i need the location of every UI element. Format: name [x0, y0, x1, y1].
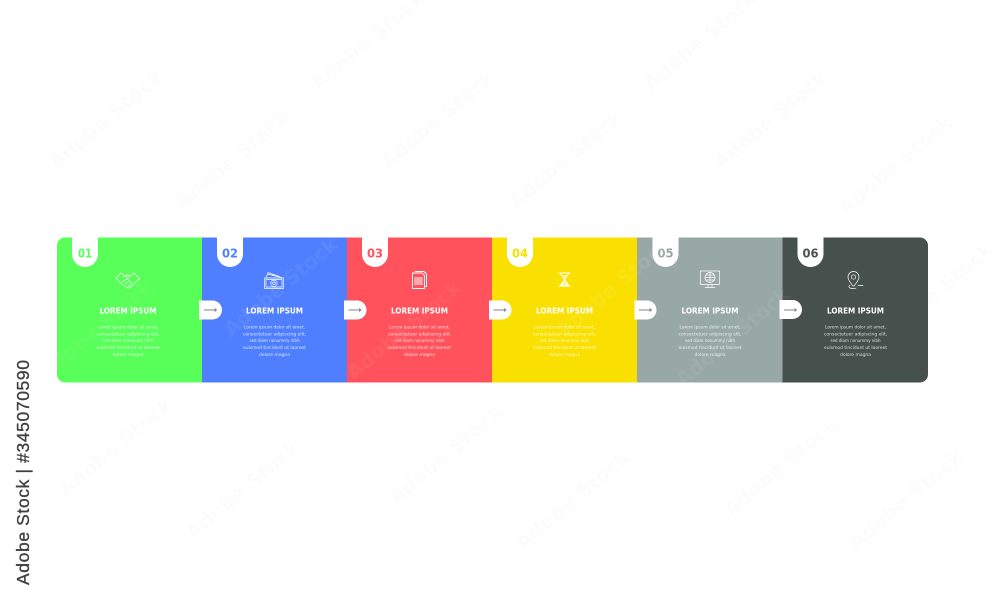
watermarks over panels	[34, 232, 795, 391]
panel background red	[347, 238, 492, 382]
number tab 05: 05	[658, 246, 674, 260]
body text: Lorem ipsum dolor sit amet,	[389, 324, 450, 330]
number tab 04	[507, 237, 533, 267]
body text: sed diam nonummy nibh	[540, 338, 590, 344]
number tab 02	[217, 237, 243, 267]
watermarks over panels: Adobe Stock	[219, 232, 343, 341]
body text: Lorem ipsum dolor sit amet,	[98, 324, 159, 330]
body text: sed diam nonummy nibh	[685, 338, 735, 344]
panel: step 01	[57, 237, 202, 382]
body text: dolore magna	[112, 352, 144, 358]
heading: LOREM IPSUM	[682, 306, 738, 316]
body text: sed diam nonummy nibh	[103, 338, 153, 344]
panel: step 06	[782, 237, 928, 382]
panel background dark	[782, 238, 928, 382]
watermarks over panels: Adobe Stock	[34, 275, 158, 384]
arrow tab 4	[634, 300, 656, 320]
heading: LOREM IPSUM	[100, 306, 156, 316]
panel: step 05	[637, 237, 782, 382]
number tab 03	[362, 237, 388, 267]
body text: euismod tincidunt ut laoreet	[678, 345, 742, 351]
body text: euismod tincidunt ut laoreet	[96, 345, 160, 351]
icon: banknotes	[264, 272, 284, 288]
number tab 01: 01	[78, 246, 92, 260]
panel background yellow	[492, 238, 638, 382]
heading: LOREM IPSUM	[536, 306, 593, 316]
body text	[388, 324, 452, 358]
body text: Lorem ipsum dolor sit amet,	[244, 324, 305, 330]
body text: euismod tincidunt ut laoreet	[824, 345, 887, 351]
body text: dolore magna	[259, 352, 290, 358]
body text: dolore magna	[404, 352, 435, 358]
number tab 05	[652, 237, 678, 267]
body text: Lorem ipsum dolor sit amet,	[825, 324, 886, 330]
stock id side label: Adobe Stock | #345070590	[13, 360, 33, 585]
body text: dolore magna	[840, 352, 871, 358]
icon: documents	[412, 272, 426, 288]
body text: dolore magna	[549, 352, 580, 358]
body text: sed diam nonummy nibh	[394, 338, 445, 344]
body text	[533, 324, 597, 358]
body text: consectetuer adipiscing elit,	[243, 332, 307, 338]
icon: map pin	[848, 272, 863, 289]
body text: sed diam nonummy nibh	[830, 338, 881, 344]
body text: consectetuer adipiscing elit,	[388, 332, 452, 338]
body text: Lorem ipsum dolor sit amet,	[680, 324, 741, 330]
panel: step 02	[202, 237, 348, 382]
heading: LOREM IPSUM	[246, 306, 303, 316]
arrow tab 2	[344, 300, 366, 320]
panel: step 03	[347, 237, 492, 382]
body text	[678, 324, 742, 358]
body text: sed diam nonummy nibh	[250, 338, 300, 344]
body text: Lorem ipsum dolor sit amet,	[534, 324, 595, 330]
heading: LOREM IPSUM	[391, 306, 448, 316]
icon: monitor with globe	[700, 271, 720, 288]
panel background green	[57, 238, 202, 382]
body text: euismod tincidunt ut laoreet	[243, 345, 306, 351]
body text	[96, 324, 160, 358]
body text: consectetuer adipiscing elit,	[96, 332, 160, 338]
number tab 06	[798, 237, 824, 267]
number tab 02: 02	[222, 246, 238, 260]
icon: hourglass	[559, 273, 570, 286]
panel: step 04	[492, 237, 638, 382]
body text	[243, 324, 307, 358]
panel background blue	[202, 238, 348, 382]
watermarks over panels: Adobe Stock	[671, 282, 795, 391]
body text: consectetuer adipiscing elit,	[678, 332, 742, 338]
arrow tab 1	[199, 300, 222, 320]
body text: dolore magna	[694, 352, 726, 358]
number tab 03: 03	[367, 246, 383, 260]
body text: consectetuer adipiscing elit,	[533, 332, 597, 338]
panel background grey	[637, 238, 782, 382]
number tab 04: 04	[512, 246, 528, 260]
body text: euismod tincidunt ut laoreet	[533, 345, 596, 351]
heading: LOREM IPSUM	[827, 306, 884, 316]
body text	[824, 324, 888, 358]
watermarks over panels: Adobe Stock	[342, 275, 466, 384]
number tab 06: 06	[802, 246, 819, 260]
arrow tab 5	[780, 300, 802, 319]
body text: consectetuer adipiscing elit,	[824, 332, 888, 338]
watermarks over panels: Adobe Stock	[552, 232, 676, 341]
arrow tab 3	[489, 300, 512, 320]
body text: euismod tincidunt ut laoreet	[388, 345, 451, 351]
icon: handshake	[116, 273, 140, 288]
number tab 01	[72, 237, 98, 267]
